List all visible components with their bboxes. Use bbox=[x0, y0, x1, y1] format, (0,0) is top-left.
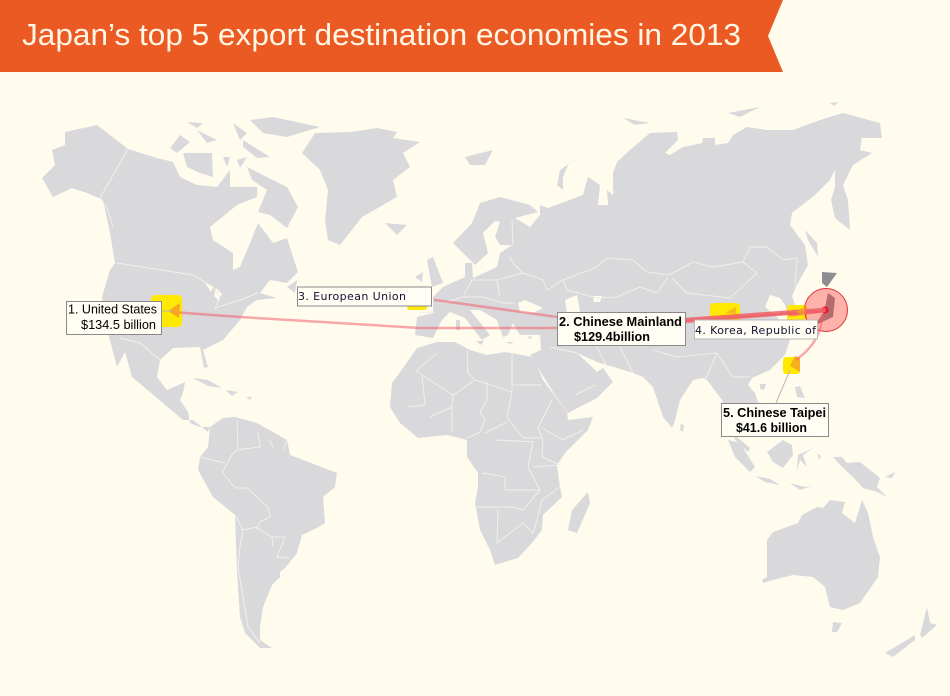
Australia bbox=[762, 500, 880, 610]
arrowheads bbox=[168, 303, 805, 318]
North America bbox=[20, 125, 298, 432]
label: Chinese Mainland: $129.4billion bbox=[574, 329, 650, 344]
Hainan, Sri Lanka, Philippines bbox=[680, 384, 822, 438]
Africa bbox=[390, 342, 593, 565]
label: European Union: 3. European Union bbox=[298, 290, 406, 303]
Arctic Russia islands bbox=[465, 102, 838, 190]
inland seas bbox=[205, 283, 602, 320]
label: United States bbox=[66, 302, 162, 334]
label: European Union bbox=[298, 287, 432, 306]
label: United States: 1. United States bbox=[68, 302, 157, 316]
label: Chinese Taipei: 5. Chinese Taipei bbox=[723, 405, 826, 420]
Caribbean bbox=[193, 378, 252, 400]
title: Japan’s top 5 export destination economies in 2013 bbox=[22, 17, 741, 52]
Arctic islands bbox=[170, 117, 320, 228]
Iceland bbox=[385, 223, 407, 235]
Sakhalin bbox=[805, 230, 818, 257]
title banner bbox=[0, 0, 783, 72]
label: Chinese Mainland bbox=[558, 312, 686, 346]
world map bbox=[20, 102, 937, 657]
Japan highlight circle bbox=[804, 288, 848, 332]
Tasmania bbox=[832, 622, 842, 632]
Newfoundland bbox=[287, 280, 297, 293]
Southeast Asia islands bbox=[728, 440, 895, 497]
Japan bbox=[814, 272, 837, 326]
South America bbox=[198, 417, 337, 648]
country borders bbox=[100, 149, 797, 643]
UK and Ireland bbox=[415, 257, 443, 287]
label: Korea bbox=[694, 320, 818, 339]
label: Korea: 4. Korea, Republic of bbox=[695, 324, 817, 337]
label: Chinese Mainland: 2. Chinese Mainland bbox=[559, 314, 682, 329]
Greenland bbox=[302, 128, 420, 245]
leader lines bbox=[162, 311, 790, 403]
label: Chinese Taipei: $41.6 billion bbox=[736, 420, 807, 435]
New Zealand bbox=[885, 607, 937, 657]
export flow arrows bbox=[1, 1, 824, 359]
Madagascar bbox=[568, 492, 590, 533]
Eurasia bbox=[415, 113, 882, 452]
label: Chinese Taipei bbox=[722, 404, 828, 436]
Mediterranean islands bbox=[456, 320, 532, 345]
label: United States: $134.5 billion bbox=[81, 317, 156, 332]
yellow destination markers bbox=[151, 295, 807, 374]
